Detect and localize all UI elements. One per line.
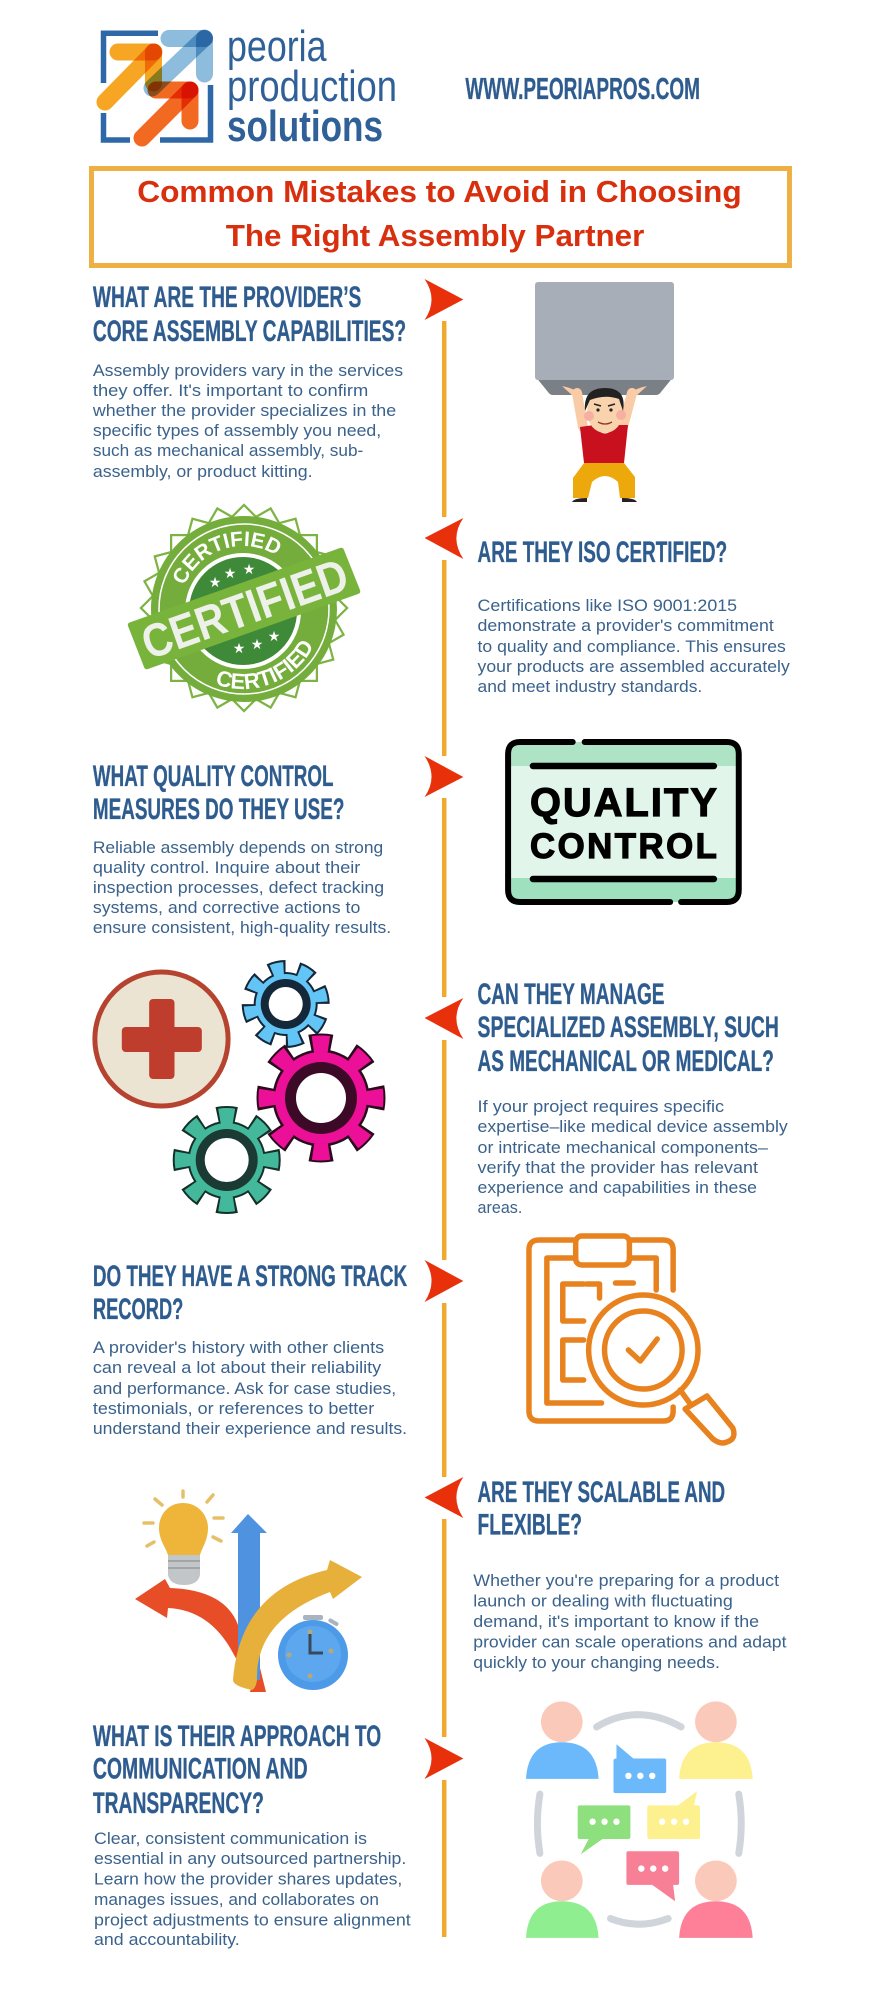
body text: verify that the provider has relevant xyxy=(478,1158,758,1177)
body text xyxy=(92,361,403,481)
heading: FLEXIBLE? xyxy=(478,1508,582,1542)
body text xyxy=(478,596,790,696)
body text: inspection processes, defect tracking xyxy=(93,878,384,897)
body text: whether the provider specializes in the xyxy=(92,401,396,420)
body text: experience and capabilities in these xyxy=(478,1178,757,1197)
body text: quickly to your changing needs. xyxy=(473,1653,720,1672)
logo wordmark xyxy=(227,22,397,151)
icon: medical cross xyxy=(95,972,228,1106)
title: The Right Assembly Partner xyxy=(226,218,644,253)
logo xyxy=(104,22,397,151)
arrow 5 xyxy=(425,1260,463,1302)
icon: person lifting block xyxy=(535,282,674,502)
body text: Reliable assembly depends on strong xyxy=(93,838,383,857)
body text: A provider's history with other clients xyxy=(93,1338,384,1357)
title xyxy=(137,174,742,253)
icon: certified badge: CERTIFIED xyxy=(217,641,312,690)
icon: blue gear xyxy=(243,961,329,1047)
body text: Clear, consistent communication is xyxy=(94,1829,367,1848)
speech bubble: green xyxy=(578,1805,630,1854)
icon: clipboard with magnifier xyxy=(529,1236,734,1443)
body text xyxy=(93,1338,407,1438)
icon: certified badge: ★ xyxy=(209,575,221,591)
body text xyxy=(94,1829,411,1949)
section 2: ISO certified xyxy=(128,504,790,712)
body text: essential in any outsourced partnership. xyxy=(94,1849,406,1868)
body text: systems, and corrective actions to xyxy=(93,898,360,917)
body text: and accountability. xyxy=(94,1930,240,1949)
arrow 1 xyxy=(425,279,463,320)
arrow 2 xyxy=(425,518,463,559)
logo wordmark: peoria xyxy=(227,22,327,71)
heading: ARE THEY ISO CERTIFIED? xyxy=(478,536,727,569)
arrow 4 xyxy=(425,998,463,1039)
body text: assembly, or product kitting. xyxy=(93,462,313,481)
heading: WHAT IS THEIR APPROACH TO xyxy=(93,1720,381,1753)
body text xyxy=(478,1097,788,1217)
body text: Certifications like ISO 9001:2015 xyxy=(478,596,737,615)
body text: and meet industry standards. xyxy=(478,677,702,696)
icon: people chatting xyxy=(526,1701,753,1938)
body text: manages issues, and collaborates on xyxy=(94,1890,379,1909)
body text: they offer. It's important to confirm xyxy=(93,381,368,400)
body text: If your project requires specific xyxy=(478,1097,725,1116)
icon: certified badge xyxy=(128,504,360,712)
body text: Whether you're preparing for a product xyxy=(473,1571,779,1590)
body text: such as mechanical assembly, sub- xyxy=(93,441,363,460)
heading xyxy=(478,1476,725,1542)
person: green xyxy=(526,1860,599,1938)
body text: and performance. Ask for case studies, xyxy=(93,1379,396,1398)
section 5: track record xyxy=(93,1236,734,1443)
speech bubble: yellow xyxy=(647,1791,700,1839)
heading: COMMUNICATION AND xyxy=(93,1752,308,1786)
icon: quality control sign xyxy=(508,742,739,902)
body text: areas. xyxy=(478,1198,522,1217)
body text: to quality and compliance. This ensures xyxy=(478,637,786,656)
body text: your products are assembled accurately xyxy=(478,657,790,676)
timeline xyxy=(425,279,463,1937)
body text: expertise–like medical device assembly xyxy=(478,1117,788,1136)
icon: certified badge: ★ xyxy=(243,562,255,578)
icon: certified badge: ★ xyxy=(251,637,263,653)
section 1: core capabilities xyxy=(92,281,674,502)
body text: testimonials, or references to better xyxy=(93,1399,375,1418)
arrow 6 xyxy=(425,1477,463,1518)
body text: demand, it's important to know if the xyxy=(473,1612,759,1631)
heading xyxy=(93,1260,407,1326)
heading: MEASURES DO THEY USE? xyxy=(93,793,344,826)
arrow 7 xyxy=(425,1738,463,1779)
body text: ensure consistent, high-quality results. xyxy=(93,918,391,937)
body text: Assembly providers vary in the services xyxy=(93,361,403,380)
body text: can reveal a lot about their reliability xyxy=(93,1358,382,1377)
icon: magenta gear xyxy=(267,1044,375,1152)
speech bubble: pink xyxy=(626,1851,679,1901)
website url: WWW.PEORIAPROS.COM xyxy=(465,71,700,106)
heading: WHAT QUALITY CONTROL xyxy=(93,760,333,793)
timeline line xyxy=(442,321,446,1937)
title: Common Mistakes to Avoid in Choosing xyxy=(137,174,742,209)
icon: teal gear xyxy=(182,1116,271,1204)
icon: light bulb, arrows and clock xyxy=(135,1491,362,1692)
body text: quality control. Inquire about their xyxy=(93,858,361,877)
section 4: specialized assembly xyxy=(95,961,788,1217)
body text: provider can scale operations and adapt xyxy=(473,1632,787,1651)
icon: certified badge: ★ xyxy=(224,566,236,582)
heading: TRANSPARENCY? xyxy=(93,1787,264,1820)
icon: certified badge: ★ xyxy=(233,641,245,657)
heading: ARE THEY SCALABLE AND xyxy=(478,1476,725,1509)
heading: DO THEY HAVE A STRONG TRACK xyxy=(93,1260,407,1293)
heading xyxy=(478,978,779,1078)
quality control label xyxy=(530,781,717,866)
icon: logo mark xyxy=(104,33,210,140)
title box xyxy=(91,168,789,266)
heading: WHAT ARE THE PROVIDER’S xyxy=(93,281,361,314)
icon: certified badge: CERTIFIED xyxy=(134,548,355,669)
body text: Learn how the provider shares updates, xyxy=(94,1869,402,1889)
arrow 3 xyxy=(425,756,463,797)
body text: project adjustments to ensure alignment xyxy=(94,1910,411,1930)
icon: certified badge: CERTIFIED xyxy=(174,531,280,583)
heading: CORE ASSEMBLY CAPABILITIES? xyxy=(93,315,406,348)
heading xyxy=(93,281,406,348)
speech bubble: blue xyxy=(613,1744,666,1793)
body text: launch or dealing with fluctuating xyxy=(473,1592,733,1611)
person: blue xyxy=(526,1701,599,1779)
logo wordmark: production xyxy=(227,62,397,111)
person: pink xyxy=(679,1860,753,1938)
person: yellow xyxy=(679,1701,753,1779)
quality control label: QUALITY xyxy=(530,781,717,825)
section 7: communication xyxy=(93,1701,753,1949)
body text: specific types of assembly you need, xyxy=(93,421,381,440)
section 3: quality control xyxy=(93,742,739,937)
body text xyxy=(473,1571,787,1672)
heading xyxy=(93,1720,381,1820)
body text: understand their experience and results. xyxy=(93,1419,407,1438)
logo wordmark: solutions xyxy=(227,102,383,151)
heading: RECORD? xyxy=(93,1293,183,1326)
icon: certified badge: ★ xyxy=(268,629,280,645)
body text: demonstrate a provider's commitment xyxy=(478,616,774,635)
section 6: scalable xyxy=(135,1476,787,1692)
infographic content xyxy=(89,71,792,1949)
body text xyxy=(93,838,391,937)
quality control label: CONTROL xyxy=(530,827,717,866)
heading xyxy=(93,760,344,826)
heading: CAN THEY MANAGE xyxy=(478,978,664,1011)
body text: or intricate mechanical components– xyxy=(478,1138,768,1157)
